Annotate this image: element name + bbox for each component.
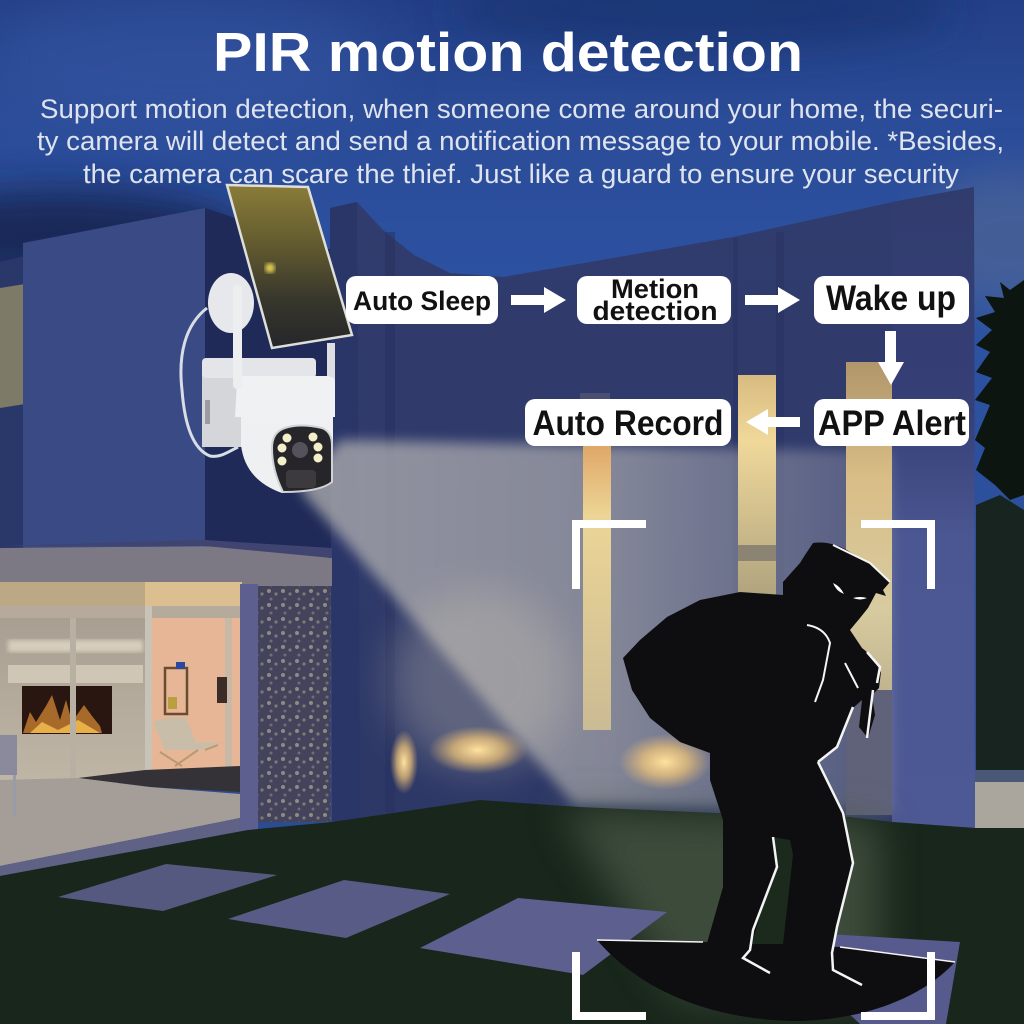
gap between legs bbox=[752, 837, 793, 944]
camera light beam bbox=[300, 440, 892, 812]
left wall block bbox=[23, 208, 205, 548]
wall mount bbox=[208, 273, 254, 333]
wall column shading bbox=[385, 232, 395, 812]
battery box bbox=[202, 362, 242, 447]
right antenna bbox=[327, 343, 335, 385]
heading: PIR motion detection bbox=[213, 21, 803, 83]
arrow bbox=[511, 287, 566, 313]
flow: Auto Sleep: Auto Sleep bbox=[353, 286, 491, 316]
top plate bbox=[202, 358, 316, 378]
rug bbox=[78, 766, 240, 792]
main long wall bbox=[330, 187, 975, 828]
description text: Support motion detection, when someone come around your home, the securi- bbox=[40, 94, 1003, 124]
flow: Auto Sleep bbox=[346, 276, 498, 324]
white rim light bbox=[597, 545, 955, 985]
flow: Auto Record: Auto Record bbox=[532, 404, 724, 443]
flow: Metion detection: Metion bbox=[611, 274, 699, 304]
wall sconce bbox=[217, 677, 227, 703]
lawn bbox=[0, 800, 1024, 1024]
camera dome bbox=[235, 376, 335, 417]
icon: burglar silhouette bbox=[597, 542, 955, 1021]
description text: the camera can scare the thief. Just like a guard to ensure your security bbox=[83, 159, 960, 189]
far left wall bbox=[0, 256, 25, 550]
icon: solar camera bbox=[181, 185, 352, 493]
camera face bbox=[272, 426, 332, 492]
solar panel bbox=[227, 185, 352, 348]
flow: Metion detection bbox=[577, 274, 731, 326]
arrow bbox=[746, 409, 800, 435]
ground shadow bbox=[597, 940, 955, 1021]
detection frame corners bbox=[576, 524, 931, 1016]
lens bbox=[292, 442, 308, 458]
slab edge bbox=[0, 818, 248, 876]
floor bbox=[0, 778, 240, 866]
description text: ty camera will detect and send a notification message to your mobile. *Besides, bbox=[37, 126, 1004, 156]
fireplace bbox=[22, 686, 112, 734]
flow: APP Alert: APP Alert bbox=[818, 404, 966, 443]
LEDs bbox=[278, 432, 322, 466]
ceiling bbox=[0, 582, 242, 606]
roof band bbox=[0, 546, 332, 586]
flow: Wake up: Wake up bbox=[826, 279, 956, 318]
wall up-light glows bbox=[390, 726, 711, 794]
lower porch and room bbox=[0, 540, 332, 876]
arrow bbox=[745, 287, 800, 313]
right side foliage bbox=[975, 280, 1024, 828]
lounge chair bbox=[153, 718, 222, 750]
right column bbox=[892, 187, 975, 828]
room posts bbox=[70, 618, 76, 781]
description text bbox=[37, 94, 1004, 189]
cable bbox=[181, 308, 238, 456]
window slits bbox=[580, 362, 892, 815]
shelf bbox=[165, 668, 187, 714]
left antenna bbox=[233, 285, 242, 389]
back room walls bbox=[0, 618, 150, 783]
arrow bbox=[878, 331, 904, 385]
camera head bbox=[241, 417, 333, 493]
building bbox=[0, 187, 975, 828]
patio chair bbox=[0, 735, 17, 775]
body and sack bbox=[623, 542, 890, 975]
stepping stones bbox=[58, 864, 960, 1024]
fire bbox=[23, 695, 102, 733]
eyes bbox=[833, 583, 867, 600]
flow: Metion detection: detection bbox=[592, 296, 718, 326]
decorative mosaic column bbox=[240, 584, 331, 830]
